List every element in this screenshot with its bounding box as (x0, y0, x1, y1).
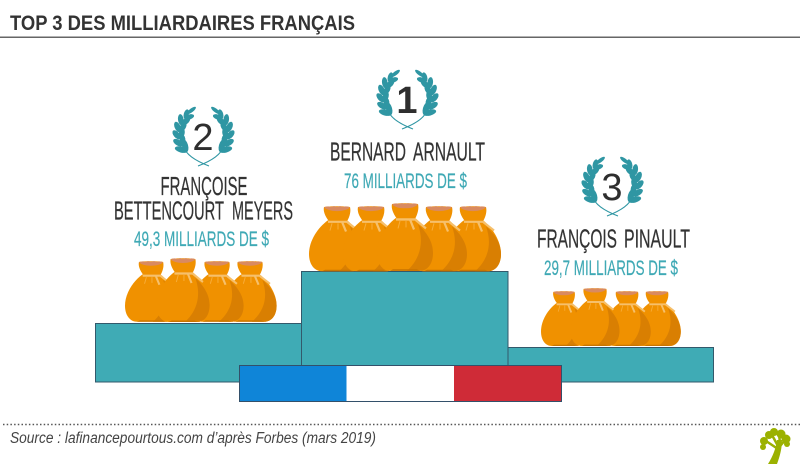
panel: third place (537, 156, 690, 346)
French flag base (239, 365, 562, 402)
podium: second place (96, 324, 302, 382)
name: Françoise Bettencourt Meyers: FRANÇOISE (160, 171, 248, 201)
laurel badge 1 (375, 69, 440, 129)
name: Bernard Arnault: BERNARD (330, 136, 406, 166)
title: TOP 3 DES MILLIARDAIRES FRANÇAIS (10, 12, 355, 35)
name: François Pinault: PINAULT (624, 224, 690, 254)
money bags: four (125, 258, 277, 322)
laurel badge 2: 2 (192, 117, 214, 159)
name: Françoise Bettencourt Meyers (114, 171, 293, 226)
name: Françoise Bettencourt Meyers: MEYERS (232, 196, 293, 226)
footer dotted divider (3, 424, 800, 426)
amount: 76 milliards: 76 MILLIARDS DE $ (344, 170, 467, 193)
podium: first place (302, 272, 508, 372)
name: Françoise Bettencourt Meyers: BETTENCOURT (114, 196, 224, 226)
panel: first place (309, 69, 501, 271)
laurel badge 2 (171, 106, 236, 166)
source note: Source : lafinancepourtous.com d’après Forbes (mars 2019) (10, 430, 376, 447)
name: Bernard Arnault: ARNAULT (413, 136, 485, 166)
laurel badge 3: 3 (601, 167, 623, 209)
podium: third place (508, 348, 714, 382)
money bags: five (309, 203, 501, 271)
icon: green tree logo (760, 428, 790, 464)
panel: second place (114, 106, 293, 322)
amount: 49,3 milliards: 49,3 MILLIARDS DE $ (134, 228, 269, 251)
name: François Pinault: FRANÇOIS (537, 224, 617, 254)
laurel badge 1: 1 (396, 80, 418, 122)
laurel badge 3 (580, 156, 645, 216)
title rule (0, 36, 800, 38)
amount: 29,7 milliards: 29,7 MILLIARDS DE $ (544, 257, 678, 280)
money bags: four (541, 288, 681, 346)
